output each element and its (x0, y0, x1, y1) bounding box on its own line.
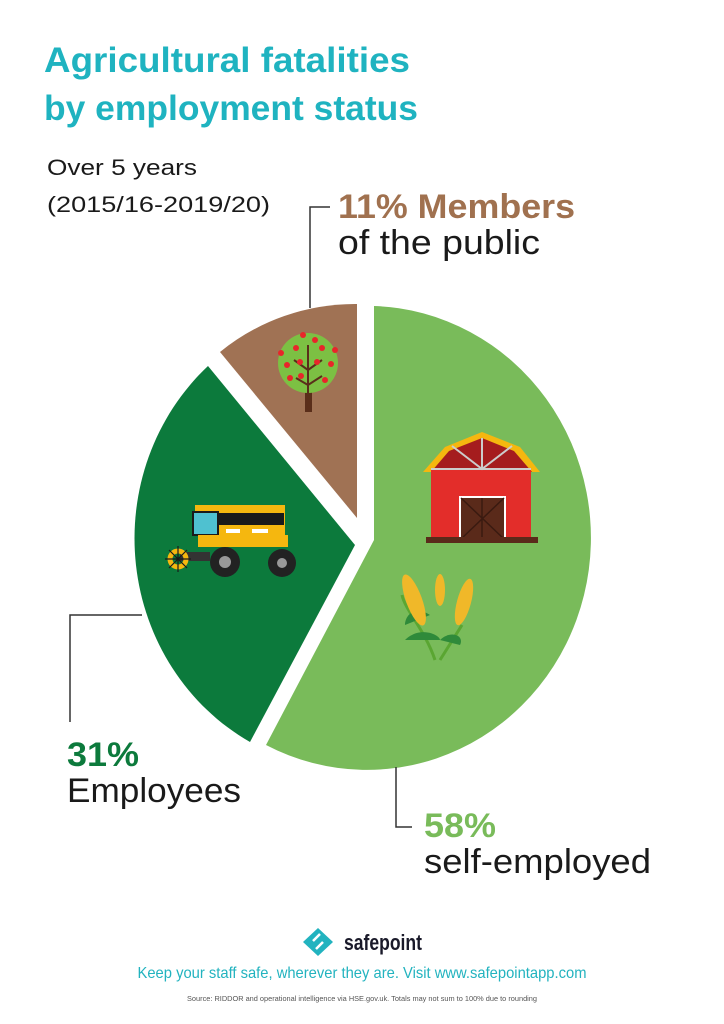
source note: Source: RIDDOR and operational intelligence via HSE.gov.uk. Totals may not sum to 100% due to rounding (187, 994, 537, 1003)
subtitle: (2015/16-2019/20) (47, 192, 270, 217)
subtitle (47, 155, 270, 217)
label: self-employed: 58% (424, 807, 496, 845)
tagline: Keep your staff safe, wherever they are. Visit www.safepointapp.com (138, 965, 586, 982)
label: employees (67, 615, 241, 810)
pie slice: members of the public 11% (220, 304, 357, 518)
label: members of the public (310, 188, 575, 308)
logo: safepoint (303, 928, 423, 956)
icon: combine harvester (165, 505, 296, 577)
label: employees: Employees (67, 772, 241, 810)
label: self-employed: self-employed (424, 843, 651, 881)
icon: apple tree (278, 332, 338, 412)
label: members of the public: of the public (338, 224, 540, 262)
title: Agricultural fatalities (44, 41, 410, 80)
pie slice: employees 31% (135, 366, 355, 742)
title: by employment status (44, 89, 418, 128)
icon: corn (397, 572, 477, 660)
logo: safepoint: safepoint (344, 930, 423, 955)
icon: barn (423, 432, 540, 543)
title (44, 41, 418, 128)
subtitle: Over 5 years (47, 155, 197, 180)
label: members of the public: 11% Members (338, 188, 575, 226)
pie slice: self-employed 58% (266, 306, 591, 770)
label: employees: 31% (67, 736, 139, 774)
label: self-employed (396, 767, 651, 881)
